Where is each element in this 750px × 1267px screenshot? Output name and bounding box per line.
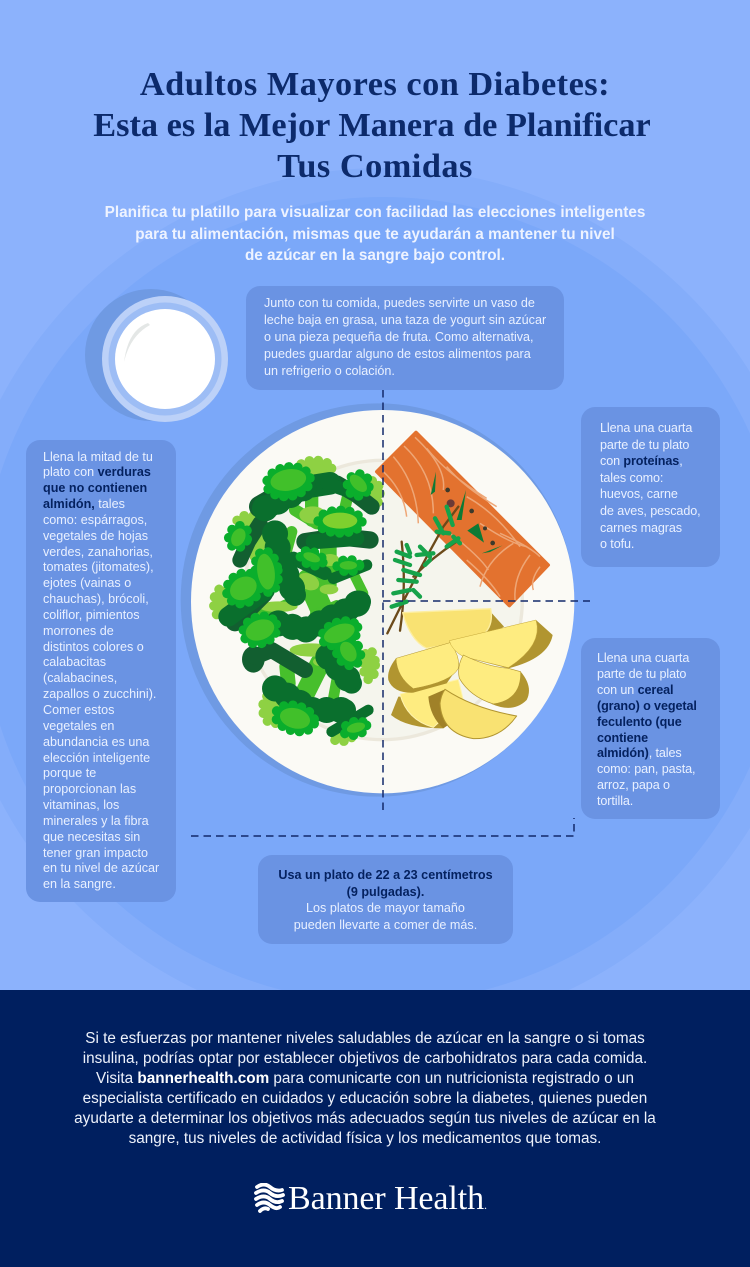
panel: vegetables: proporcionan las xyxy=(43,782,136,796)
plate illustration xyxy=(180,404,574,796)
panel: proteins: huevos, carne xyxy=(600,487,678,501)
footer text: especialista certificado en cuidados y educación sobre la diabetes, quienes pueden xyxy=(83,1090,647,1106)
footer text xyxy=(74,1030,656,1146)
title: Adultos Mayores con Diabetes: xyxy=(140,65,610,103)
panel: milk and dairy note: Junto con tu comida, puedes servirte un vaso de xyxy=(264,296,535,310)
herb sprig xyxy=(387,507,460,633)
icon: glass of milk xyxy=(85,289,228,422)
title: Tus Comidas xyxy=(277,147,473,185)
footer band xyxy=(0,990,750,1267)
footer text: insulina, podrías optar por establecer objetivos de carbohidratos para cada comida. xyxy=(83,1050,647,1066)
broccoli xyxy=(214,460,380,741)
panel: vegetables: coliflor, pimientos xyxy=(43,608,140,622)
panel: vegetables: que no contienen xyxy=(43,481,147,495)
panel: proteins: con proteínas, xyxy=(600,454,683,468)
subtitle: de azúcar en la sangre bajo control. xyxy=(245,247,505,264)
plate xyxy=(181,403,574,797)
salmon xyxy=(377,432,548,606)
panel: milk and dairy note: leche baja en grasa, una taza de yogurt sin azúcar xyxy=(264,313,546,327)
panel: grains and starches: parte de tu plato xyxy=(597,667,686,681)
panel: vegetables xyxy=(26,440,176,902)
panel: grains and starches: Llena una cuarta xyxy=(597,651,689,665)
footer text: sangre, tus niveles de actividad física y los medicamentos que tomas. xyxy=(129,1130,601,1146)
panel: grains and starches: arroz, papa o xyxy=(597,778,670,792)
panel: vegetables: abundancia es una xyxy=(43,735,149,749)
panel: proteins: Llena una cuarta xyxy=(600,421,692,435)
subtitle: para tu alimentación, mismas que te ayudarán a mantener tu nivel xyxy=(135,226,615,242)
panel: proteins: parte de tu plato xyxy=(600,438,689,452)
panel: vegetables: porque te xyxy=(43,766,96,780)
title: Esta es la Mejor Manera de Planificar xyxy=(93,106,651,144)
panel: plate size: (9 pulgadas). xyxy=(347,884,424,898)
icon: Banner Health waves xyxy=(254,1183,285,1213)
panel: milk and dairy note: puedes guardar alguno de estos alimentos para xyxy=(264,347,531,361)
panel: vegetables: minerales y la fibra xyxy=(43,814,149,828)
logo wordmark: Banner Health. xyxy=(288,1180,487,1217)
panel: proteins: carnes magras xyxy=(600,521,682,535)
panel: vegetables: Llena la mitad de tu xyxy=(43,450,153,464)
panel: vegetables: distintos colores o xyxy=(43,640,144,654)
panel: vegetables: plato con verduras xyxy=(43,465,151,479)
panel: grains and starches: almidón), tales xyxy=(597,746,682,760)
panel: grains and starches: contiene xyxy=(597,731,648,745)
panel: vegetables: calabacitas xyxy=(43,655,106,669)
subtitle xyxy=(105,204,645,264)
panel: plate size xyxy=(258,855,513,944)
title xyxy=(93,65,651,185)
panel: grains and starches: tortilla. xyxy=(597,794,633,808)
panel: vegetables: que necesitas sin xyxy=(43,830,140,844)
potatoes xyxy=(388,609,553,739)
panel: plate size: pueden llevarte a comer de más. xyxy=(294,918,477,932)
panel: vegetables: tomates (jitomates), xyxy=(43,560,154,574)
panel: grains and starches: (grano) o vegetal xyxy=(597,699,697,713)
panel: grains and starches: como: pan, pasta, xyxy=(597,762,695,776)
panel: vegetables: zapallos o zucchini). xyxy=(43,687,156,701)
panel: vegetables: verdes, zanahorias, xyxy=(43,545,153,559)
panel: vegetables: como: espárragos, xyxy=(43,513,147,527)
panel: vegetables: vitaminas, los xyxy=(43,798,119,812)
panel: vegetables: elección inteligente xyxy=(43,751,150,765)
panel: grains and starches: feculento (que xyxy=(597,715,682,729)
panel: plate size: Los platos de mayor tamaño xyxy=(306,901,465,915)
panel: grains and starches xyxy=(581,638,720,819)
panel: plate size: Usa un plato de 22 a 23 centímetros xyxy=(278,868,493,882)
subtitle: Planifica tu platillo para visualizar con facilidad las elecciones inteligentes xyxy=(105,204,645,221)
panel: proteins: tales como: xyxy=(600,471,663,485)
panel: vegetables: (calabacines, xyxy=(43,671,117,685)
panel: vegetables: Comer estos xyxy=(43,703,114,717)
panel: milk and dairy note: o una pieza pequeña de fruta. Como alternativa, xyxy=(264,330,534,344)
footer text: Si te esfuerzas por mantener niveles saludables de azúcar en la sangre o si tomas xyxy=(85,1030,645,1046)
panel: vegetables: vegetales de hojas xyxy=(43,529,148,543)
panel: vegetables: almidón, tales xyxy=(43,497,125,511)
panel: proteins xyxy=(581,407,720,567)
panel: milk and dairy note: un refrigerio o colación. xyxy=(264,364,395,378)
panel: vegetables: vegetales en xyxy=(43,719,114,733)
footer text: ayudarte a determinar los objetivos más adecuados según tus niveles de azúcar en la xyxy=(74,1110,656,1126)
panel: vegetables: en tu nivel de azúcar xyxy=(43,861,159,875)
panel: vegetables: morrones de xyxy=(43,624,114,638)
panel: vegetables: ejotes (vainas o xyxy=(43,576,131,590)
panel: vegetables: chauchas), brócoli, xyxy=(43,592,149,606)
panel: proteins: de aves, pescado, xyxy=(600,504,701,518)
footer text: Visita bannerhealth.com para comunicarte con un nutricionista registrado o un xyxy=(96,1070,634,1086)
panel: vegetables: tener gran impacto xyxy=(43,846,148,860)
panel: vegetables: en la sangre. xyxy=(43,877,116,891)
panel: grains and starches: con un cereal xyxy=(597,683,673,697)
panel: milk and dairy note xyxy=(246,286,564,390)
panel: proteins: o tofu. xyxy=(600,537,634,551)
